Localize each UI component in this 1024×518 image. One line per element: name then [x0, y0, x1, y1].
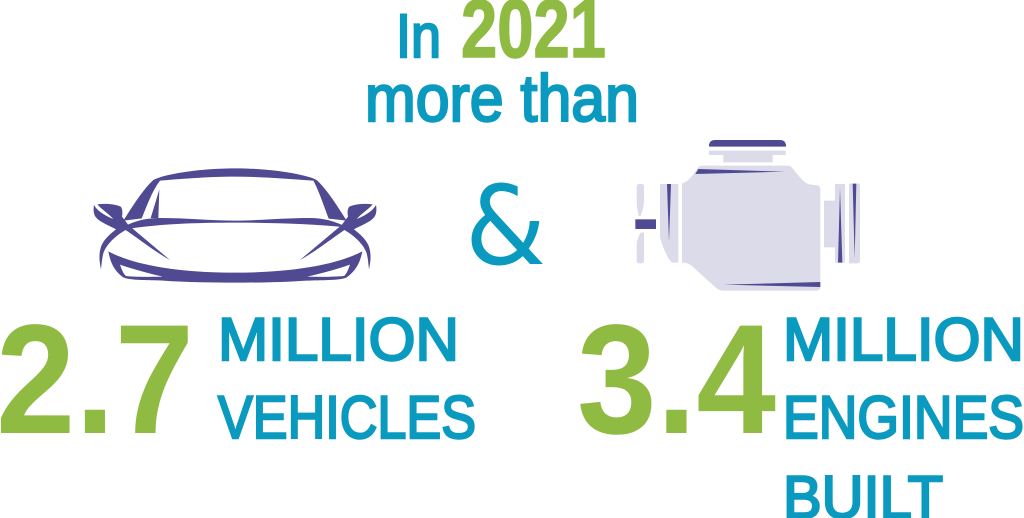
accent: far right plate [853, 184, 856, 258]
car belt line [125, 218, 347, 229]
icon: engine [635, 140, 860, 291]
engine fan light blades [637, 184, 644, 263]
label: MILLION: MILLION [218, 306, 459, 373]
ampersand: & [465, 162, 546, 290]
engine right housing [824, 184, 845, 263]
accent: right housing [838, 188, 842, 263]
label: VEHICLES: VEHICLES [218, 384, 476, 451]
stat: 2.7 million vehicles [0, 293, 476, 467]
engine fan hub [635, 219, 656, 229]
engine dark accents [667, 169, 856, 287]
icon: car front [94, 168, 376, 283]
label: MILLION: MILLION [783, 306, 1024, 373]
engine top cap dark [709, 140, 786, 147]
number: 3.4: 3.4 [577, 293, 776, 467]
title [365, 0, 639, 135]
title line: more than: more than [365, 61, 639, 135]
engine main block [682, 166, 820, 291]
car left pillar sliver [151, 189, 159, 218]
title word: In: In [396, 2, 441, 70]
car roof and pillars [123, 168, 347, 221]
accent: left housing [667, 184, 671, 242]
accent: bottom of block [723, 282, 820, 287]
number: 2.7: 2.7 [0, 293, 194, 467]
engine left housing [660, 184, 678, 263]
stat: 3.4 million engines built [577, 293, 1024, 518]
engine top cap light [709, 151, 786, 162]
car left mirror and fender [94, 204, 170, 269]
engine far right plate [849, 184, 860, 263]
accent: top of block [695, 169, 785, 174]
car bumper and headlights [108, 251, 362, 283]
car right mirror and fender [300, 204, 376, 269]
